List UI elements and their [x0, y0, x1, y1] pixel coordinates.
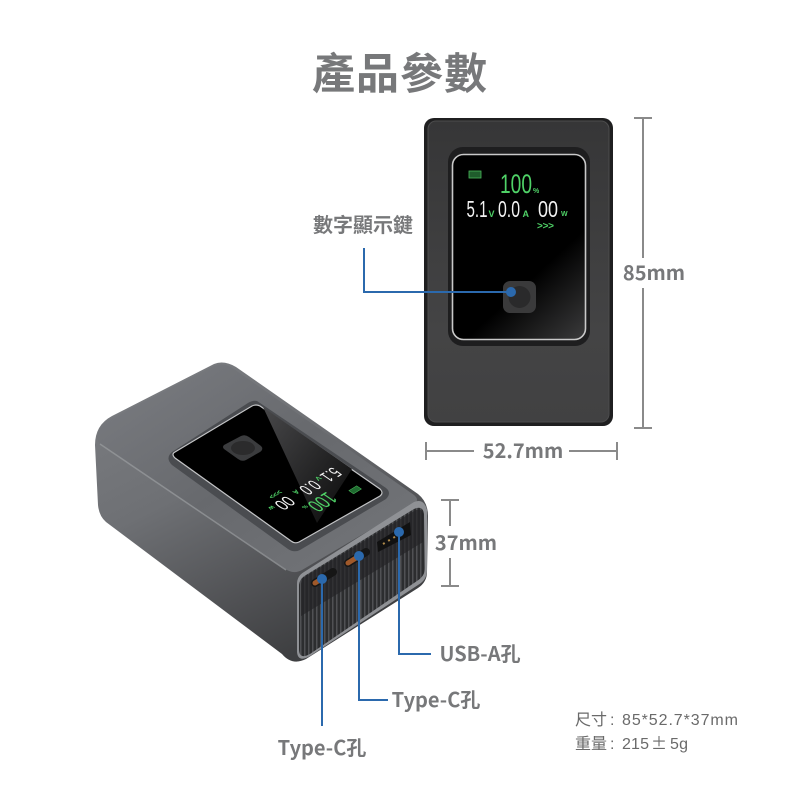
display readouts: 0.0 — [294, 477, 326, 498]
dimension: width 52.7mm — [426, 435, 617, 464]
watt unit: W — [561, 211, 568, 218]
display readouts: W — [265, 504, 275, 511]
charging arrows: >>> — [537, 221, 554, 232]
ampere unit: A — [522, 209, 530, 219]
volt unit: V — [488, 209, 495, 219]
dimension: height 85mm: 85mm — [623, 257, 685, 286]
specification text: 5g — [670, 736, 688, 753]
dimension: thickness 37mm: 37mm — [435, 527, 497, 556]
specification text: 85*52.7*37mm — [622, 712, 738, 729]
specification text — [575, 711, 738, 754]
callout: USB-A port: USB-A孔 — [439, 638, 521, 667]
display readouts: % — [299, 503, 309, 509]
display glass — [173, 405, 382, 543]
display readouts: 00 — [270, 493, 300, 513]
specification text: ± — [651, 730, 667, 754]
top face — [97, 365, 417, 572]
dimension: height 85mm — [623, 118, 685, 428]
display button — [503, 281, 536, 313]
port: middle Type-C — [348, 552, 366, 563]
display readouts — [257, 460, 364, 529]
front view power bank — [424, 118, 613, 426]
callout: left Type-C port: Type-C孔 — [278, 732, 366, 761]
display readouts: 100 — [302, 488, 342, 515]
battery indicator — [469, 171, 481, 178]
callout: display button — [313, 209, 516, 297]
side edge highlight — [100, 444, 286, 570]
port: left Type-C — [315, 572, 333, 583]
percent sign: % — [533, 188, 540, 195]
power readout: 00 — [538, 196, 558, 222]
front face frame — [297, 501, 427, 659]
specification text: 重量 — [575, 735, 607, 753]
display button — [223, 435, 262, 461]
specification text: : — [610, 712, 614, 729]
angled view power bank — [95, 363, 428, 662]
ribbed front panel — [299, 508, 425, 656]
display glass — [452, 154, 586, 340]
callout: left Type-C port — [278, 574, 366, 761]
callout: USB-A port — [394, 527, 521, 667]
dimension: thickness 37mm — [435, 500, 497, 586]
battery percent readout: 100 — [500, 169, 532, 199]
screen bezel — [448, 147, 590, 346]
display readouts: 5.1 — [315, 465, 346, 485]
title: 產品參數 — [312, 40, 488, 102]
glass reflection — [263, 407, 352, 523]
body silhouette and side face — [95, 363, 428, 662]
callout: middle Type-C port: Type-C孔 — [392, 684, 480, 713]
display readouts: >>> — [266, 488, 285, 501]
screen bezel — [168, 401, 389, 551]
port: USB-A — [377, 522, 411, 552]
current readout: 0.0 — [498, 196, 520, 222]
dimension: width 52.7mm: 52.7mm — [483, 435, 563, 464]
voltage readout: 5.1 — [466, 196, 488, 222]
callout: display button: 數字顯示鍵 — [313, 209, 413, 238]
specification text: 尺寸 — [575, 711, 607, 729]
display readouts: V — [312, 475, 322, 481]
display readouts: A — [290, 488, 300, 495]
specification text: : — [610, 736, 614, 753]
callout: middle Type-C port — [354, 551, 480, 713]
specification text: 215 — [622, 736, 649, 753]
